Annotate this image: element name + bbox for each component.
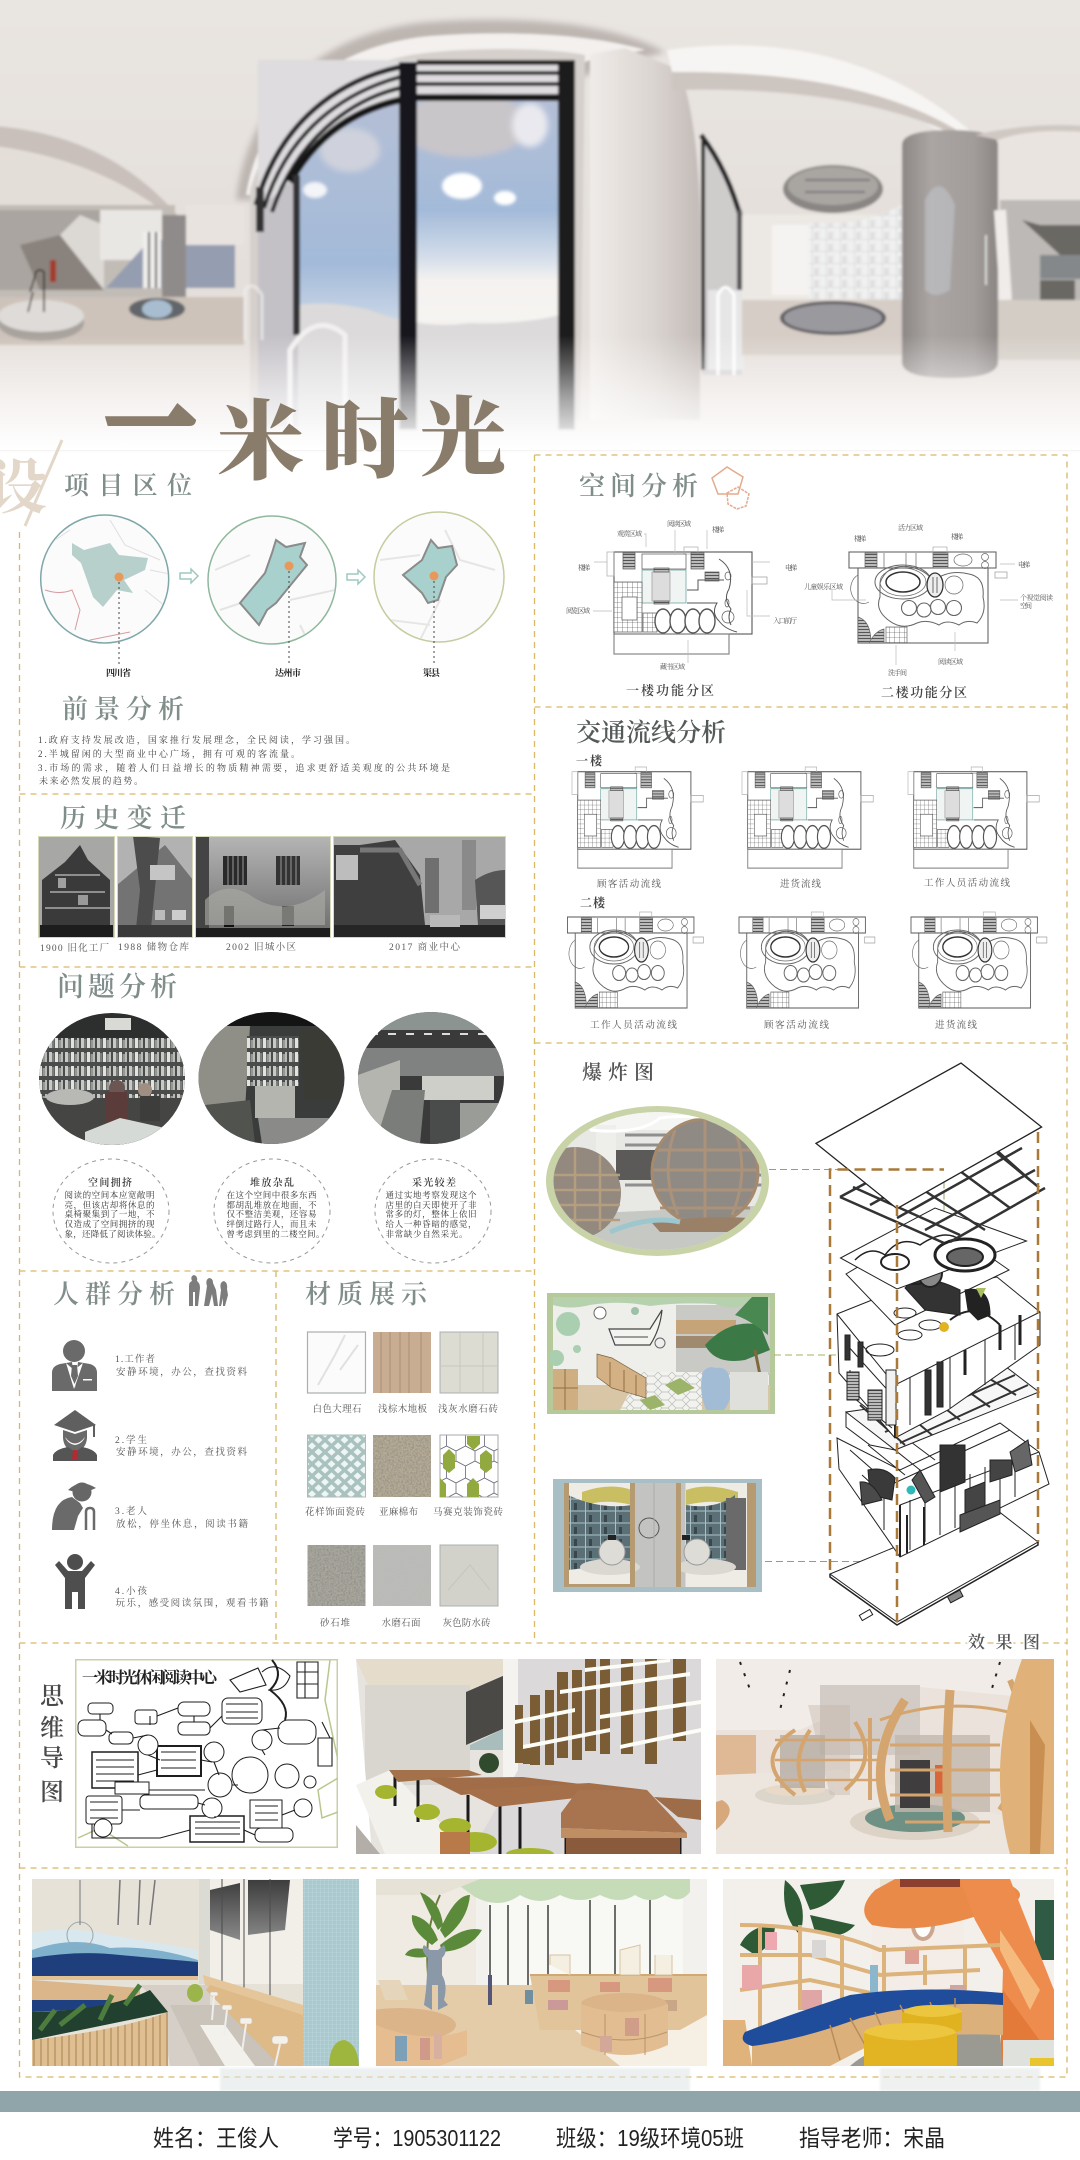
icon: child: [55, 1554, 95, 1609]
rendering: wooden spheres: [716, 1659, 1054, 1854]
bubble: crowded space: 空间拥挤: [88, 1176, 132, 1189]
title: 米: [217, 372, 304, 497]
text block: prospects: [38, 734, 450, 786]
sketch: mind map: 一米时光休闲阅读中心: [82, 1668, 219, 1687]
far right alcove: [975, 125, 1080, 360]
captions: second floor flows: [590, 1019, 977, 1031]
swatch captions: 浅灰水磨石砖: [438, 1403, 498, 1415]
window with sky: [245, 60, 575, 430]
panel: history: [38, 804, 506, 954]
swatch captions: 白色大理石: [312, 1403, 362, 1415]
footer credits: 学号：1905301122: [333, 2125, 501, 2151]
second floor block: [837, 1277, 1040, 1438]
photo: poor lighting: [358, 1012, 504, 1144]
axonometric exploded drawing: [816, 1063, 1049, 1625]
sketch: mind map: [75, 1659, 338, 1848]
bubble: poor lighting: [375, 1159, 491, 1263]
photo: 1900 factory: [38, 836, 115, 938]
rendering: children's slide and bench: [723, 1879, 1054, 2066]
heading: materials: 材质展示: [305, 1280, 428, 1309]
swatch: wood floor: [373, 1332, 431, 1393]
slab with wavy outline: [840, 1208, 1026, 1289]
roof slab: [816, 1063, 1042, 1209]
bubble: messy stacking: 绊倒过路行人，而且未: [226, 1219, 317, 1230]
panel: circulation analysis: [568, 719, 1047, 1031]
second floor labels: 空间: [1020, 601, 1032, 610]
second floor labels: 儿童娱乐区域: [804, 582, 843, 591]
panel: space analysis: [566, 467, 1053, 700]
bubble: crowded space: [53, 1159, 169, 1263]
caption: first floor: 一楼功能分区: [626, 683, 714, 698]
photo: 2017 commercial centre: [333, 836, 506, 938]
hero: panoramic interior render: [0, 0, 1080, 450]
heading: prospects: 前景分析: [62, 695, 184, 724]
heading: problem analysis: 问题分析: [57, 972, 177, 1002]
panel: problem analysis: [39, 972, 504, 1263]
heading: circulation analysis: 交通流线分析: [576, 719, 726, 747]
swatch captions: [305, 1403, 503, 1629]
photo: 1988 warehouse: [117, 836, 193, 938]
panel: user groups: [52, 1275, 269, 1609]
text: elderly: 3.老人: [115, 1505, 147, 1517]
heading: mind map: 图: [40, 1779, 64, 1806]
second floor labels: 洗手间: [888, 668, 907, 677]
first floor labels: 楼梯: [578, 563, 590, 572]
title: 光: [420, 369, 506, 493]
bubble: poor lighting: 给人一种昏暗的感觉，: [386, 1219, 476, 1230]
heading: space analysis: 空间分析: [579, 472, 698, 501]
panel: materials: [305, 1280, 503, 1629]
panel: prospects: [38, 695, 450, 786]
title: 一: [107, 356, 194, 481]
map labels: 达州市: [275, 667, 301, 678]
plan: F1 staff flow: [908, 767, 1039, 868]
swatch: gravel: [308, 1545, 366, 1606]
photo: crowded space: [39, 1013, 185, 1146]
right bookshelf niche: [742, 165, 902, 355]
panel: mind map: [40, 1659, 338, 1848]
first floor labels: 藏书区域: [660, 662, 685, 671]
rendering: counter bar and mural: [32, 1879, 359, 2066]
arrow: [180, 569, 198, 583]
swatch: patterned tile: [308, 1435, 366, 1497]
footer credits: [153, 2125, 945, 2151]
second floor labels: 阅读区域: [938, 657, 963, 666]
photo captions: 1988 储物仓库: [118, 941, 189, 953]
text: worker: 安静环境，办公，查找资料: [116, 1366, 247, 1378]
label: second floor: 二楼: [580, 895, 606, 910]
icon: pentagons: [712, 467, 749, 509]
swatch: white marble: [308, 1332, 366, 1393]
left gallery alcove: [0, 126, 244, 345]
slab with stairs: [846, 1220, 1009, 1325]
text: student: [115, 1434, 247, 1458]
first floor labels: 楼梯: [712, 525, 724, 534]
label: first floor: 一楼: [576, 753, 603, 768]
captions: first floor flows: 顾客活动流线: [597, 878, 661, 890]
dashed axis lines: [830, 1132, 1038, 1622]
bubble: crowded space: 仅造成了空间拥挤的现: [64, 1219, 155, 1229]
vignette: whale wall: [547, 1293, 775, 1414]
captions: first floor flows: 进货流线: [780, 878, 821, 890]
bubble: crowded space: 桌椅聚集到了一地，不: [64, 1209, 155, 1220]
icon: student: [53, 1410, 97, 1461]
swatch captions: 花样饰面瓷砖: [305, 1506, 365, 1518]
map: Dazhou city: [208, 516, 336, 666]
text: child: 4.小孩: [115, 1585, 147, 1597]
map: Qu county: [374, 512, 504, 666]
bubble: crowded space: 阅读的空间本应宽敞明: [64, 1190, 155, 1200]
heading: mind map: [40, 1683, 66, 1806]
photo: messy stacking: [198, 1012, 345, 1144]
photo captions: 2002 旧城小区: [226, 941, 296, 953]
map labels: 渠县: [423, 667, 441, 678]
watermark: 设: [0, 440, 62, 526]
first floor labels: 电梯: [785, 563, 797, 572]
photo: 2002 old district: [195, 836, 331, 938]
text block: prospects: 未来必然发展的趋势。: [39, 775, 143, 786]
swatch captions: 浅棕木地板: [378, 1403, 427, 1415]
plan: F2 goods flow: [911, 912, 1047, 1008]
swatch captions: 水磨石面: [382, 1617, 421, 1629]
captions: first floor flows: 工作人员活动流线: [924, 877, 1010, 889]
window arch reveal: [236, 20, 665, 420]
swatch captions: 灰色防水砖: [442, 1617, 491, 1629]
swatch captions: 砂石堆: [320, 1617, 350, 1629]
heading: mind map: 维: [40, 1715, 64, 1742]
second floor labels: 电梯: [1018, 560, 1030, 569]
photo captions: 1900 旧化工厂: [40, 942, 109, 954]
bubble: poor lighting: 采光较差: [412, 1176, 456, 1189]
panel: exploded view: [529, 1061, 1049, 1625]
captions: second floor flows: 顾客活动流线: [764, 1019, 829, 1031]
icon: silhouettes: [189, 1275, 228, 1306]
text: worker: [115, 1353, 247, 1378]
plan: F2 staff flow: [568, 912, 703, 1008]
icon: elderly: [52, 1482, 96, 1530]
bubble: messy stacking: [214, 1159, 330, 1263]
footer shadow band: [220, 2068, 1040, 2091]
text: elderly: 放松，停坐休息，阅读书籍: [116, 1518, 248, 1530]
heading: exploded view: 爆炸图: [582, 1061, 654, 1084]
first floor labels: 阅读区域: [667, 519, 691, 528]
swatch: waterproof tile: [440, 1545, 498, 1606]
text: worker: 1.工作者: [115, 1353, 155, 1365]
first floor labels: [566, 519, 797, 671]
footer credits: 班级：19级环境05班: [556, 2125, 744, 2151]
footer credits: 姓名：王俊人: [153, 2125, 279, 2151]
second floor labels: [804, 523, 1053, 677]
swatch captions: 马赛克装饰瓷砖: [433, 1506, 503, 1518]
text block: prospects: 1.政府支持发展改造，国家推行发展理念，全民阅读，学习强国。: [38, 734, 355, 746]
vignette: sphere bookshelves: [546, 1106, 769, 1256]
second floor labels: 活力区域: [898, 523, 923, 532]
heading: project location: 项目区位: [64, 472, 192, 500]
title: 时: [321, 370, 408, 495]
center wall column: [590, 48, 700, 420]
bubble: messy stacking: 堆放杂乱: [250, 1176, 294, 1189]
lower beam grid: [846, 1360, 1039, 1450]
map: Sichuan province: [40, 515, 175, 666]
plan: first floor functions: [607, 547, 767, 654]
swatch: terrazzo tile: [440, 1332, 498, 1393]
bubble: messy stacking: 曾考虑到里的二楼空间。: [226, 1229, 324, 1239]
plan: F1 visitor flow: [572, 767, 703, 868]
right column: [902, 130, 998, 378]
callout dashes: [765, 1170, 983, 1562]
arrow: [347, 570, 365, 584]
heading: user groups: 人群分析: [53, 1280, 175, 1309]
swatch: terrazzo: [373, 1545, 431, 1606]
first floor labels: 观赏区域: [617, 529, 642, 538]
bubble: poor lighting: 常多的灯，整体上依旧: [386, 1209, 476, 1220]
first floor labels: 阅览区域: [566, 606, 590, 615]
swatch: linen: [373, 1435, 431, 1497]
bubble: messy stacking: 在这个空间中很多东西: [226, 1190, 317, 1200]
bubble: poor lighting: 通过实地考察发现这个: [386, 1190, 477, 1200]
photo captions: [40, 941, 460, 954]
panel: project location: [40, 472, 504, 678]
rendering: café wall shelves: [356, 1659, 701, 1854]
markers: [906, 1288, 986, 1494]
text: elderly: [115, 1505, 248, 1530]
vignette: reading pods: [553, 1479, 762, 1592]
captions: second floor flows: 工作人员活动流线: [590, 1019, 677, 1031]
text block: prospects: 2.半城留闲的大型商业中心广场，拥有可观的客流量。: [38, 748, 300, 760]
captions: first floor flows: [597, 877, 1010, 890]
map labels: [106, 667, 441, 678]
right arch and window: [667, 45, 975, 375]
text: student: 2.学生: [115, 1434, 147, 1446]
bubble: messy stacking: 仅不整洁美观，还容易: [226, 1209, 316, 1220]
second floor labels: 楼梯: [951, 532, 963, 541]
bubble: crowded space: 亮，但该店却将休息的: [64, 1200, 155, 1211]
text: child: [115, 1585, 269, 1609]
caption: second floor: 二楼功能分区: [881, 685, 967, 700]
bubble: crowded space: 象，还降低了阅读体验。: [64, 1229, 160, 1240]
swatch captions: 亚麻棉布: [379, 1506, 418, 1518]
bubble: poor lighting: 店里的白天即使开了非: [386, 1200, 477, 1210]
text: student: 安静环境，办公，查找资料: [116, 1446, 247, 1458]
icon: worker: [52, 1340, 97, 1391]
heading: history: 历史变迁: [60, 804, 186, 833]
heading: mind map: 思: [40, 1683, 66, 1710]
plan: F1 goods flow: [742, 767, 873, 868]
first floor labels: 入口前厅: [773, 616, 797, 625]
footer colour band: [0, 2091, 1080, 2112]
photo captions: 2017 商业中心: [389, 941, 460, 953]
captions: second floor flows: 进货流线: [935, 1019, 977, 1031]
plan: F2 visitor flow: [739, 912, 875, 1008]
first floor block: [837, 1423, 1049, 1557]
upper beam grid: [840, 1130, 1045, 1243]
footer credits: 指导老师：宋晶: [799, 2125, 945, 2151]
swatch: mosaic: [440, 1435, 498, 1497]
second floor labels: 个视觉阅读: [1020, 593, 1053, 602]
bubble: poor lighting: 非常缺少自然采光。: [386, 1229, 468, 1239]
rendering: reading corner with bear: [376, 1879, 707, 2066]
dashed frames: [20, 455, 1067, 2077]
bubble: messy stacking: 都胡乱堆放在地面，不: [226, 1200, 317, 1211]
plan: second floor functions: [849, 547, 1007, 643]
text: child: 玩乐，感受阅读氛围，观看书籍: [116, 1597, 269, 1609]
heading: mind map: 导: [40, 1745, 64, 1772]
heading: renderings: 效果图: [968, 1633, 1040, 1652]
text block: prospects: 3.市场的需求，随着人们日益增长的物质精神需要，追求更舒适美观度的公共环境是: [38, 762, 450, 774]
map labels: 四川省: [106, 667, 132, 678]
base slab: [830, 1507, 1038, 1625]
second floor labels: 楼梯: [854, 534, 866, 543]
title: [107, 356, 506, 497]
